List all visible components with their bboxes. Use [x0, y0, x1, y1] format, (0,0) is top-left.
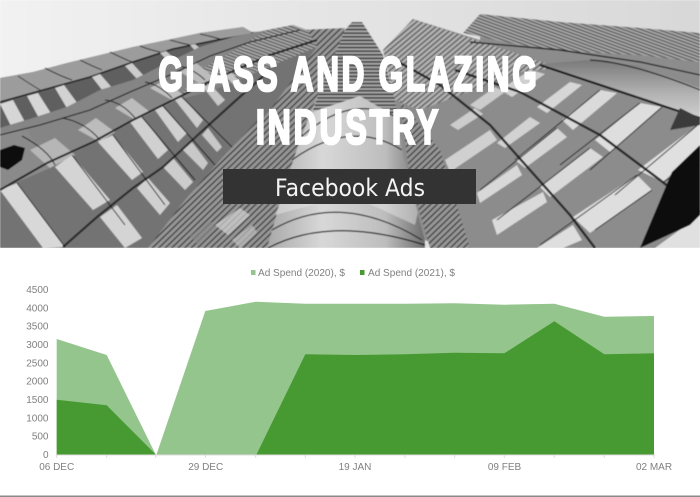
y axis labels: 3500 — [26, 322, 49, 333]
light stripes lower row — [638, 123, 700, 182]
y axis labels: 0 — [43, 450, 49, 461]
y axis labels: 1500 — [26, 395, 49, 406]
y axis labels: 500 — [32, 432, 49, 443]
x axis labels: 06 DEC — [39, 462, 74, 473]
x axis labels: 19 JAN — [339, 462, 371, 473]
dark glass lower right — [640, 145, 700, 248]
dense mesh beside cylinder — [400, 100, 470, 248]
light stripes upper row — [595, 103, 662, 152]
area chart — [26, 268, 672, 473]
x axis — [56, 455, 655, 458]
subtitle banner: Facebook Ads — [275, 174, 425, 202]
light cells in lower mesh — [215, 208, 250, 235]
area: ad spend 2021 — [57, 321, 654, 454]
white stripes upper row — [0, 183, 65, 248]
lower glazing mesh — [148, 120, 258, 248]
legend — [251, 268, 455, 279]
y axis labels: 1000 — [26, 413, 49, 424]
title — [158, 48, 540, 154]
x axis labels: 09 FEB — [488, 462, 522, 473]
subtitle banner — [223, 169, 476, 204]
y axis labels: 2500 — [26, 358, 49, 369]
y axis labels — [26, 285, 49, 461]
white stripes lower row — [100, 205, 142, 248]
rounded cap of left front tower — [0, 32, 270, 153]
header photo: glass skyscrapers — [0, 0, 700, 248]
legend: Ad Spend (2020), $ — [258, 268, 345, 279]
fine glazing between left towers and centre — [250, 28, 346, 248]
left front tower — [0, 25, 317, 248]
x axis labels — [39, 462, 672, 473]
title line 2: INDUSTRY — [256, 102, 441, 154]
sky — [0, 0, 700, 248]
legend: Ad Spend (2021), $ — [368, 268, 455, 279]
left back tower — [0, 26, 252, 128]
main ribs — [395, 60, 595, 248]
y axis labels: 2000 — [26, 377, 49, 388]
x axis labels: 02 MAR — [636, 462, 672, 473]
right tower behind — [383, 14, 700, 248]
y axis labels: 4000 — [26, 303, 49, 314]
bottom edge strip — [0, 496, 700, 497]
central cylindrical tower — [267, 22, 425, 248]
rounded cap of right tower — [540, 60, 700, 118]
ribs — [0, 40, 317, 190]
x axis labels: 29 DEC — [188, 462, 223, 473]
y axis labels: 4500 — [26, 285, 49, 296]
y axis labels: 3000 — [26, 340, 49, 351]
area: ad spend 2020 — [57, 302, 654, 454]
dark window reflection — [0, 145, 25, 170]
